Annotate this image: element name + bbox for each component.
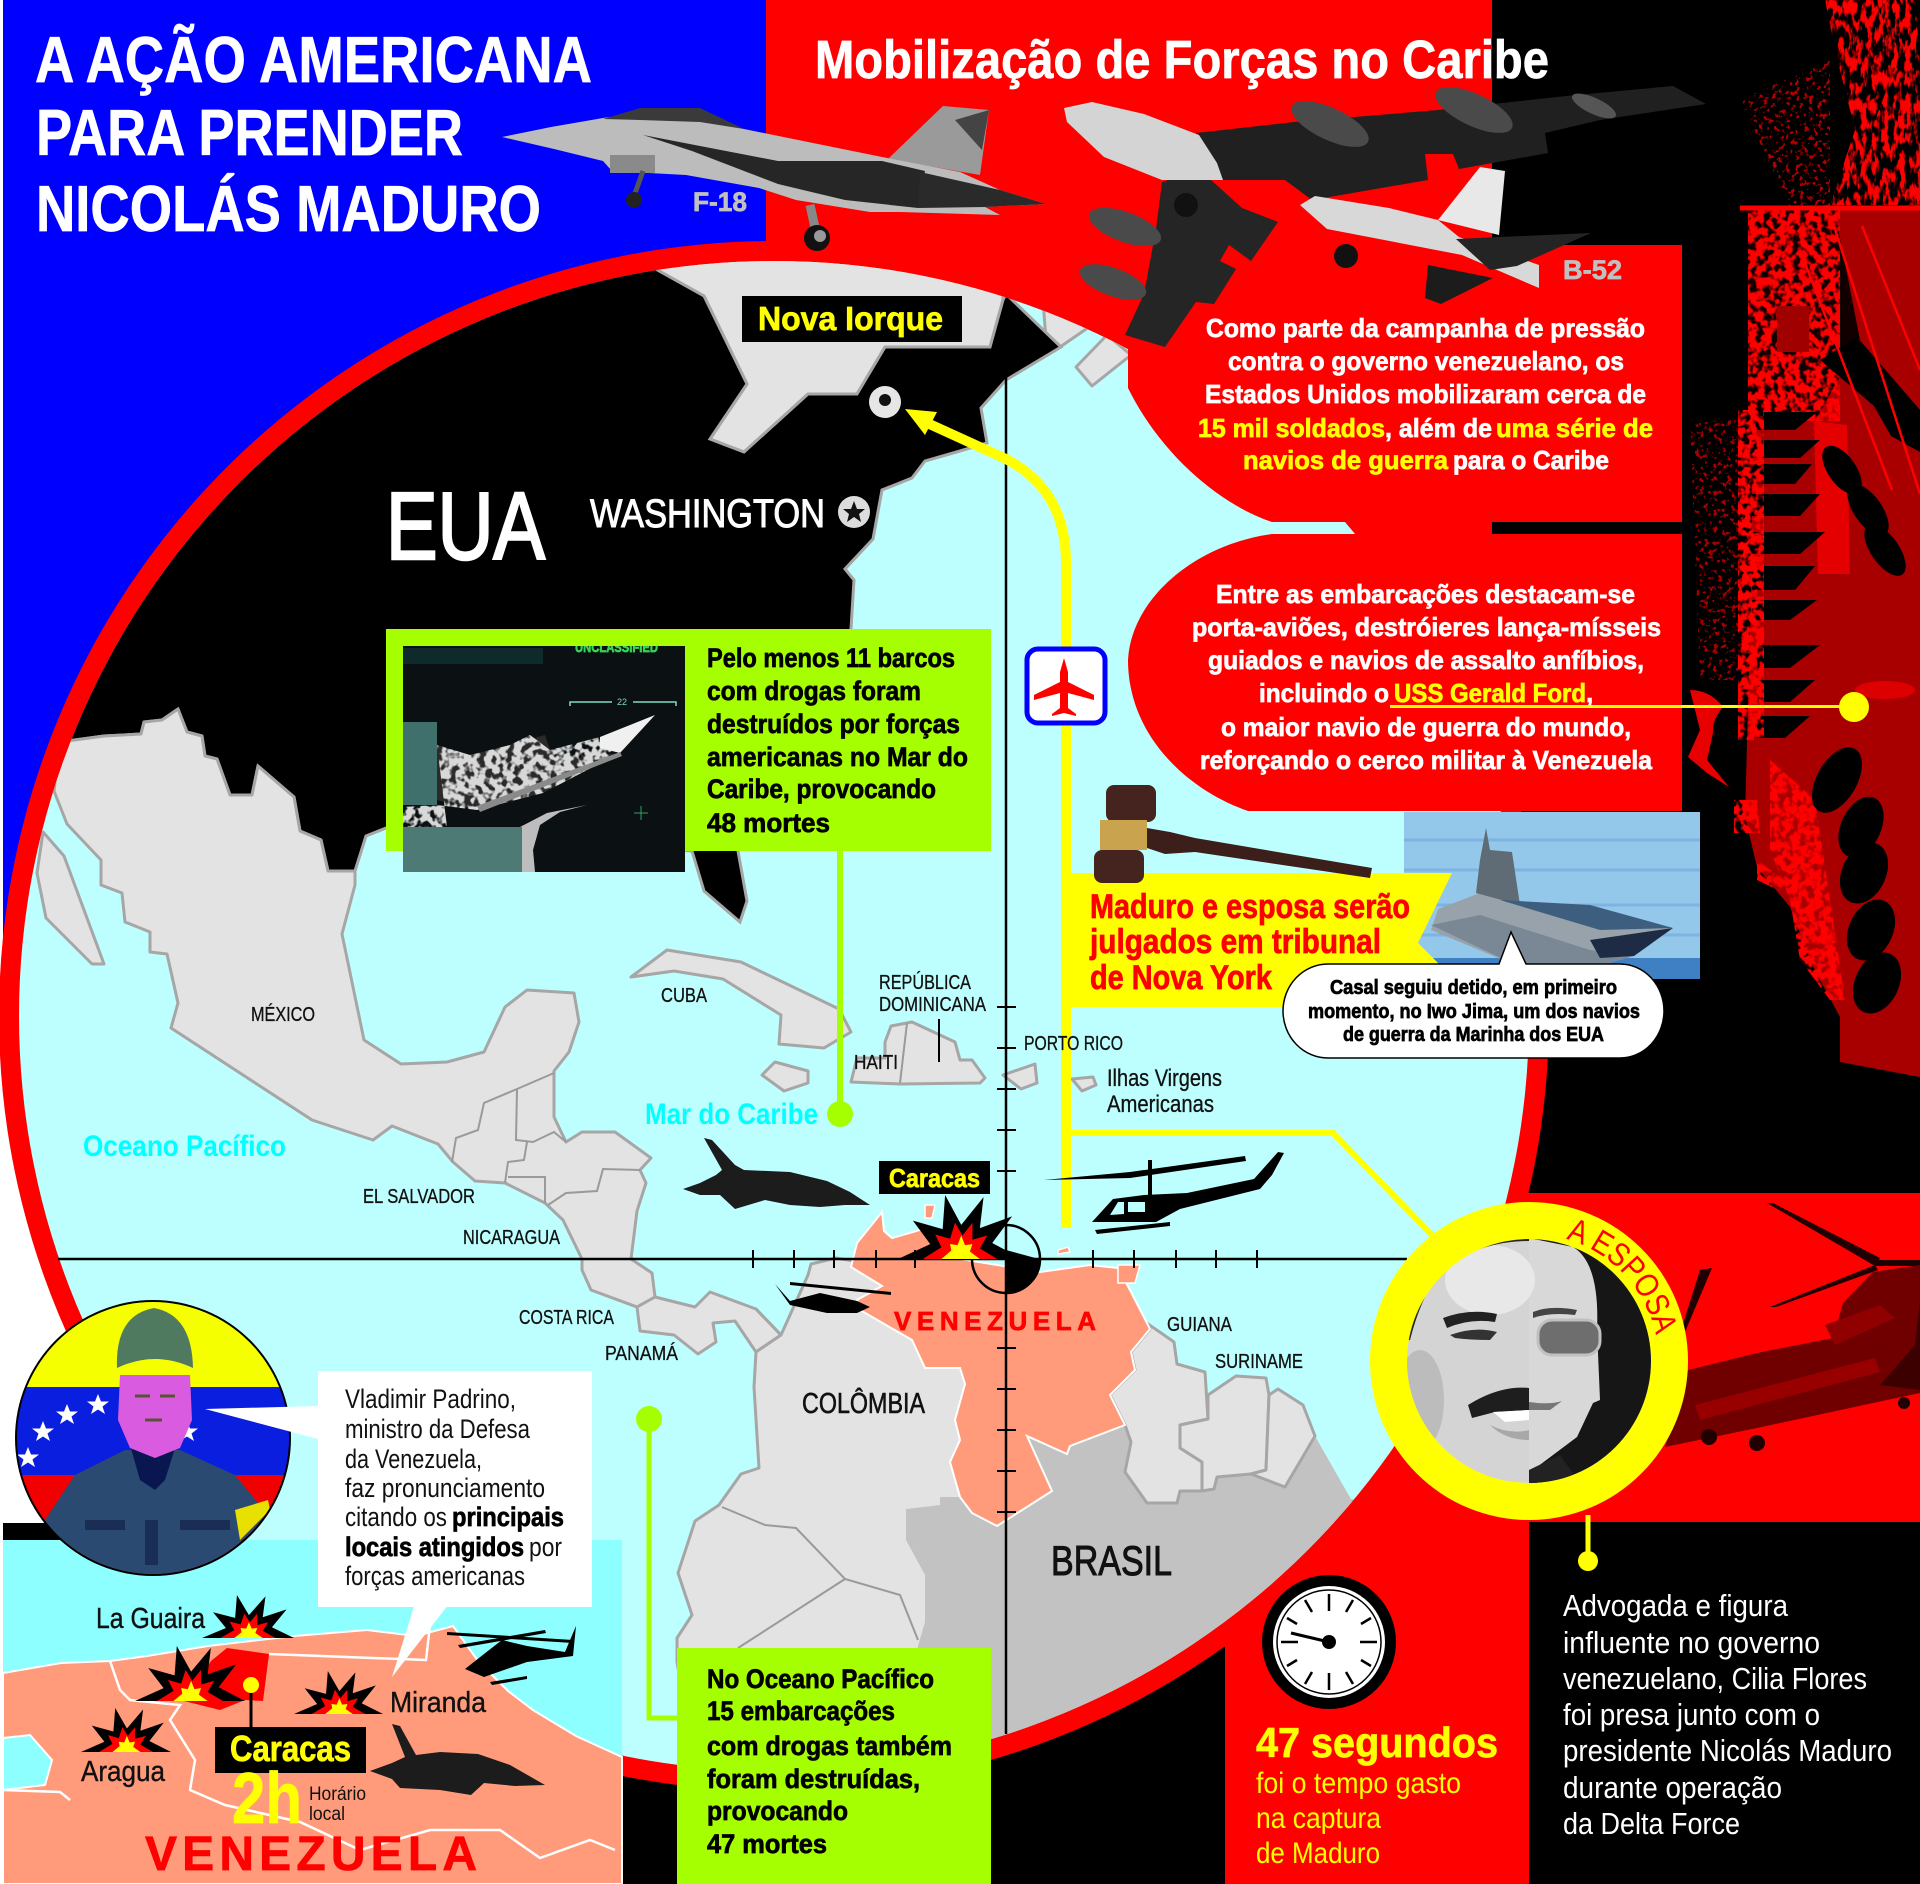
land: Baja California (37, 832, 104, 964)
panel: pressure campaign: Estados Unidos mobilizaram cerca de (1205, 379, 1646, 409)
callout: Vladimir Padrino (205, 1371, 592, 1677)
text: Cilia Flores: da Delta Force (1563, 1806, 1740, 1841)
panel: boats destroyed in the Pacific: 15 embarcações (707, 1696, 895, 1726)
labels: seas: Mar do Caribe (645, 1098, 818, 1131)
map labels: HAITI (854, 1052, 898, 1074)
map labels: EL SALVADOR (363, 1186, 475, 1208)
land: United States (70, 270, 1064, 924)
photo: amphibious assault ship (1404, 812, 1700, 979)
text: Cilia Flores: influente no governo (1563, 1625, 1820, 1660)
panel: title: NICOLÁS MADURO (36, 172, 541, 245)
text: 47 segundos: na captura (1256, 1802, 1381, 1835)
land: Venezuelan islands (925, 1205, 1140, 1283)
land: Virgin Islands (1072, 1077, 1096, 1091)
panel: boats destroyed in the Caribbean: com drogas foram (707, 676, 921, 706)
photo: helicopter Chinook in dark red (1665, 1203, 1920, 1451)
land: Hispaniola (851, 1022, 985, 1084)
borders: Ecuador and Peru (722, 1507, 918, 1648)
callout: Maduro trial: julgados em tribunal (1089, 923, 1381, 961)
pointer: wife (1578, 1515, 1598, 1571)
callout: Vladimir Padrino: forças americanas (345, 1561, 525, 1591)
callout: Vladimir Padrino: por (529, 1532, 562, 1562)
photo: boat strike: UNCLASSIFIED (575, 639, 658, 655)
callout: speech bubble: momento, no Iwo Jima, um dos navios (1308, 1001, 1640, 1023)
callout: Vladimir Padrino: faz pronunciamento (345, 1473, 545, 1503)
panel: boats destroyed in the Pacific: com drogas também (707, 1731, 952, 1761)
label: Venezuela inset: VENEZUELA (145, 1828, 477, 1881)
land: French Guiana (1251, 1389, 1315, 1487)
aircraft: attack helicopter inset (447, 1626, 576, 1685)
label: Nova Iorque: Nova Iorque (758, 300, 943, 337)
label: B-52: B-52 (1563, 255, 1622, 285)
inset map: Venezuela coast (3, 1540, 622, 1884)
panel: boats destroyed in the Pacific: No Oceano Pacífico (707, 1664, 934, 1694)
label: local time: Horário (309, 1784, 366, 1805)
panel: boats destroyed in the Caribbean: Caribe, provocando (707, 774, 936, 804)
portrait: Vladimir Padrino (15, 1300, 295, 1580)
text: 47 segundos: 47 segundos (1256, 1719, 1498, 1766)
panel: pressure campaign: , além de (1385, 413, 1492, 443)
yellow line to New York with arrow (905, 409, 1066, 1228)
map labels: GUIANA (1167, 1314, 1233, 1336)
crosshair lines and ticks (58, 367, 1407, 1734)
map labels: MÉXICO (251, 1003, 315, 1026)
map labels: PORTO RICO (1024, 1033, 1123, 1055)
aircraft: B-52 (1064, 78, 1706, 347)
background: blue block (3, 0, 766, 1016)
photo: boat strike: 22 (617, 697, 627, 707)
panel: pressure campaign: contra o governo venezuelano, os (1228, 346, 1624, 376)
aircraft: fighter over Caribbean (683, 1138, 870, 1209)
panel: boats destroyed in the Caribbean: 48 mortes (707, 808, 830, 838)
sea disc (19, 261, 1529, 1771)
panel: boats destroyed in the Pacific: provocando (707, 1796, 848, 1826)
panel: pressure campaign (1128, 245, 1682, 522)
callout: Maduro trial: de Nova York (1090, 959, 1272, 997)
text: Cilia Flores: venezuelano, Cilia Flores (1563, 1661, 1867, 1696)
map labels: NICARAGUA (463, 1227, 561, 1249)
panel: boats destroyed in the Caribbean: americanas no Mar do (707, 742, 968, 772)
label: Miranda: Miranda (390, 1687, 487, 1719)
land: Canada east pieces (1042, 310, 1128, 388)
icon: explosion La Guaira (202, 1595, 294, 1638)
icon: explosion Caracas area (135, 1646, 245, 1701)
label: 2h: 2h (232, 1759, 302, 1839)
panel: pressure campaign: navios de guerra (1243, 445, 1449, 475)
panel: ships: reforçando o cerco militar à Venezuela (1200, 745, 1653, 775)
callout: Vladimir Padrino: ministro da Defesa (345, 1414, 531, 1444)
icon: explosion over Caracas (898, 1195, 1022, 1259)
heading: Mobilização: Mobilização de Forças no Caribe (815, 30, 1549, 90)
aircraft: Huey helicopter (1044, 1152, 1284, 1234)
land: Canada (655, 261, 1004, 450)
land: Panama (637, 1292, 781, 1354)
background: lower red column (1225, 1500, 1529, 1884)
icon: explosion Aragua (81, 1708, 171, 1752)
labels: seas: Oceano Pacífico (83, 1130, 286, 1163)
icon: explosion Miranda (294, 1671, 383, 1714)
callout: speech bubble: Casal seguiu detido, em primeiro (1330, 977, 1617, 999)
panel: ships: guiados e navios de assalto anfíbios, (1208, 645, 1644, 675)
icon: clock (1262, 1575, 1396, 1709)
panel: ships: Entre as embarcações destacam-se (1216, 579, 1635, 609)
panel: ships: USS Gerald Ford (1394, 678, 1586, 708)
panel: boats destroyed in the Pacific (677, 1648, 991, 1884)
background: black strip (3, 1523, 63, 1540)
text: 47 segundos: de Maduro (1256, 1837, 1380, 1870)
background: lower right black block (1529, 1522, 1920, 1884)
callout: speech bubble (1283, 932, 1664, 1058)
label: EUA: EUA (386, 473, 545, 580)
map labels: REPÚBLICA (879, 971, 972, 994)
background: lower right red block (1225, 1193, 1920, 1522)
icon: New York marker (869, 386, 901, 418)
pointer: Dominican Republic (938, 1019, 940, 1062)
aircraft: small attack helicopter (775, 1282, 891, 1313)
label: Caracas inset: Caracas (230, 1728, 351, 1769)
marker: Caracas (243, 1677, 259, 1693)
panel: title (35, 23, 592, 245)
pointer: USS Gerald Ford (1390, 692, 1869, 722)
aircraft: F-18 (502, 106, 1046, 251)
map labels: COSTA RICA (519, 1307, 615, 1329)
label: Washington: WASHINGTON (590, 492, 825, 536)
land: Guyana (1110, 1319, 1208, 1503)
background: lower centre black block (622, 1640, 1225, 1884)
pointer: Caracas (250, 1685, 252, 1727)
labels: seas (83, 1098, 818, 1163)
icon: capital star (838, 496, 870, 528)
callout: Vladimir Padrino: da Venezuela, (345, 1444, 482, 1474)
background: black block (1492, 0, 1920, 1193)
text: Cilia Flores (1563, 1588, 1892, 1841)
callout: speech bubble: de guerra da Marinha dos EUA (1343, 1024, 1604, 1046)
map labels: CUBA (661, 985, 708, 1007)
background: red block (766, 0, 1492, 534)
callout: Vladimir Padrino: Vladimir Padrino, (345, 1384, 516, 1414)
map labels: SURINAME (1215, 1351, 1303, 1373)
panel: ships (1128, 534, 1682, 811)
yellow line to portrait (1071, 1133, 1433, 1236)
map labels: COLÔMBIA (802, 1386, 926, 1420)
callout: Vladimir Padrino: locais atingidos (345, 1532, 524, 1562)
callout: Maduro trial (1071, 873, 1452, 1007)
map labels: Ilhas Virgens (1107, 1065, 1222, 1092)
photo: aircraft carrier in red (1688, 0, 1920, 1077)
photo: boat strike (403, 639, 685, 872)
panel: ships: porta-aviões, destróieres lança-mísseis (1192, 612, 1661, 642)
panel: boats destroyed in the Caribbean (386, 629, 991, 872)
map labels: DOMINICANA (879, 994, 987, 1016)
text: 47 segundos (1256, 1719, 1498, 1870)
panel: title: PARA PRENDER (36, 96, 463, 169)
panel: pressure campaign: Como parte da campanha de pressão (1206, 313, 1645, 343)
land: Puerto Rico (1003, 1064, 1037, 1089)
icon: airplane badge (1027, 649, 1105, 723)
label: F-18: F-18 (693, 187, 747, 217)
panel: pressure campaign: uma série de (1496, 413, 1653, 443)
crosshair target (972, 1225, 1040, 1293)
map of the Americas (36, 261, 1354, 1740)
icon: gavel (1094, 785, 1372, 883)
land: Jamaica (762, 1062, 808, 1091)
pointer: Pacific (636, 1406, 677, 1718)
land: Mexico and Central America (54, 709, 655, 1307)
label: local time (309, 1784, 366, 1825)
label: Venezuela: VENEZUELA (894, 1306, 1096, 1336)
panel: ships: , (1586, 678, 1593, 708)
land: South America (676, 1256, 1354, 1740)
map labels: Americanas (1107, 1091, 1214, 1118)
text: Cilia Flores: Advogada e figura (1563, 1588, 1789, 1623)
portrait: Maduro and Cilia Flores (1396, 1238, 1660, 1483)
label: local time: local (309, 1804, 345, 1825)
land: Venezuela (851, 1212, 1150, 1526)
portrait ring (1370, 1202, 1688, 1520)
pointer: Caribbean (827, 851, 853, 1127)
borders: Central America (452, 1073, 640, 1205)
aircraft: fighter inset (370, 1724, 545, 1795)
panel: ships: o maior navio de guerra do mundo, (1221, 712, 1631, 742)
land: Brazil (906, 1426, 1352, 1740)
callout: Vladimir Padrino: citando os (345, 1502, 447, 1532)
map labels: BRASIL (1051, 1537, 1172, 1584)
callout: Vladimir Padrino: principais (452, 1502, 564, 1532)
label: Caracas map: Caracas (889, 1163, 980, 1193)
map labels: PANAMÁ (605, 1342, 679, 1365)
text: Cilia Flores: durante operação (1563, 1770, 1782, 1805)
circle ring (0, 241, 1549, 1791)
land: Suriname (1180, 1376, 1269, 1491)
label: Nova Iorque (742, 296, 962, 342)
panel: boats destroyed in the Caribbean: Pelo menos 11 barcos (707, 643, 955, 673)
panel: title: A AÇÃO AMERICANA (35, 23, 592, 96)
map labels (251, 971, 1303, 1584)
panel: boats destroyed in the Caribbean: destruídos por forças (707, 709, 960, 739)
panel: pressure campaign: para o Caribe (1453, 445, 1609, 475)
panel: boats destroyed in the Pacific: foram destruídas, (707, 1764, 920, 1794)
panel: pressure campaign: 15 mil soldados (1198, 413, 1385, 443)
label: Aragua: Aragua (81, 1756, 166, 1788)
border: Haiti (900, 1023, 907, 1083)
land: Cuba (631, 950, 851, 1048)
text: Cilia Flores: foi presa junto com o (1563, 1697, 1820, 1732)
text: 47 segundos: foi o tempo gasto (1256, 1767, 1461, 1800)
panel: ships: incluindo o (1259, 678, 1389, 708)
label: A ESPOSA: A ESPOSA (1566, 1220, 1676, 1335)
label: La Guaira: La Guaira (96, 1603, 206, 1635)
callout: Maduro trial: Maduro e esposa serão (1090, 888, 1410, 926)
panel: boats destroyed in the Pacific: 47 mortes (707, 1829, 827, 1859)
